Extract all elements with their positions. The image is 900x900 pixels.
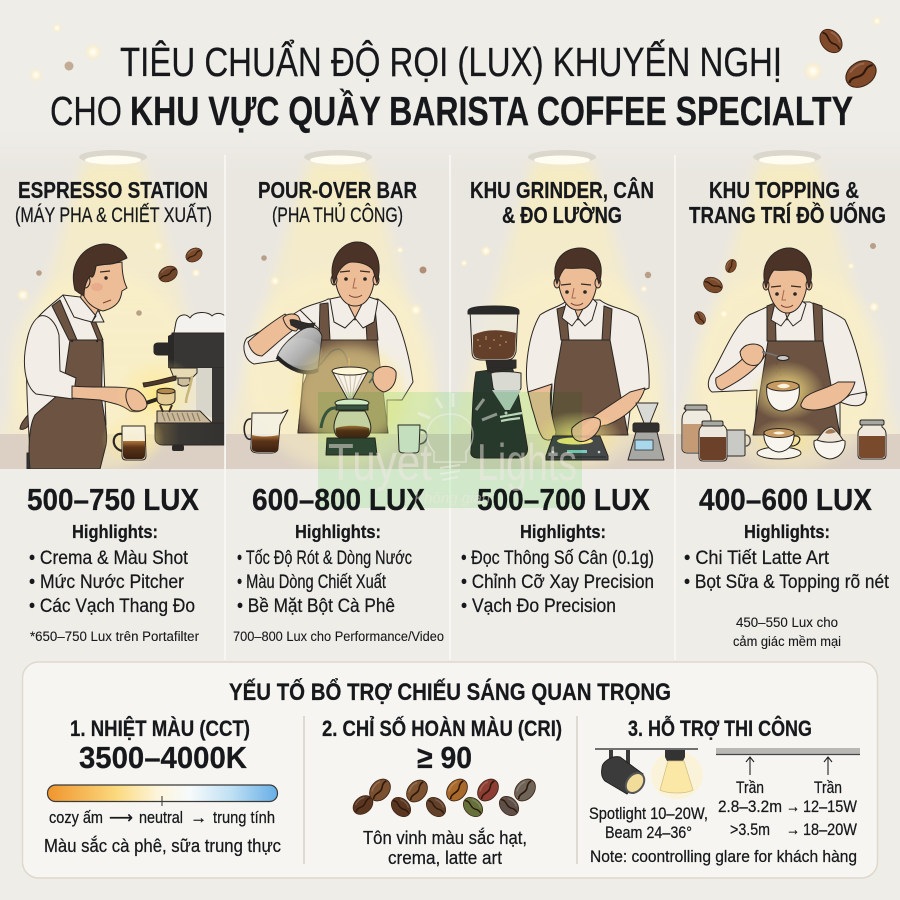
highlights list: 700–800 Lux cho Performance/Video <box>233 629 444 644</box>
illustration: barista finishing latte <box>682 243 886 470</box>
highlights list: • Các Vạch Thang Đo <box>29 596 195 617</box>
panel: supporting lighting factors <box>22 662 878 878</box>
section: colour temperature: 1. NHIỆT MÀU (CCT) <box>70 716 250 741</box>
section: colour rendering index: ≥ 90 <box>417 740 472 775</box>
highlights list <box>684 522 890 649</box>
section: colour temperature: 3500–4000K <box>79 740 248 775</box>
ceiling height table: → <box>786 797 800 816</box>
section: installation support: Note: coontrolling glare for khách hàng <box>590 847 857 866</box>
illustration: barista with grinder and scale <box>460 245 665 470</box>
highlights list: • Vạch Đo Precision <box>461 596 616 617</box>
ceiling height table <box>718 779 857 839</box>
highlights list: • Mức Nước Pitcher <box>29 572 185 593</box>
decorative coffee beans, top right <box>29 16 882 93</box>
coffee bean colour samples <box>349 775 540 821</box>
ceiling height table: 12–15W <box>803 797 857 816</box>
section: colour rendering index: 2. CHỈ SỐ HOÀN MÀU (CRI) <box>322 715 562 741</box>
heading: (PHA THỦ CÔNG) <box>272 203 403 227</box>
icon: track spotlight <box>595 749 698 797</box>
title <box>50 38 853 134</box>
CCT scale labels <box>49 809 275 827</box>
lux value: 600–800 LUX <box>252 482 425 517</box>
CCT scale labels: trung tính <box>213 809 275 827</box>
highlights list: • Bề Mặt Bột Cà Phê <box>237 596 395 617</box>
ceiling lamp <box>528 150 596 164</box>
highlights list: • Màu Dòng Chiết Xuất <box>237 572 387 593</box>
panel: grinder and scale <box>460 150 665 617</box>
ceiling height table: 2.8–3.2m <box>718 797 782 816</box>
CCT scale labels: ⟶ <box>109 809 133 827</box>
highlights list: • Chỉnh Cỡ Xay Precision <box>461 572 654 593</box>
watermark: Tuyet Lights: - Không gian <box>405 490 490 507</box>
section: colour rendering index: crema, latte art <box>388 847 502 868</box>
heading <box>470 176 654 228</box>
ceiling lamp <box>79 150 147 164</box>
highlights list <box>29 522 199 644</box>
section: installation support <box>589 715 860 866</box>
highlights list: Highlights: <box>744 522 830 542</box>
ceiling lamp <box>753 150 821 164</box>
highlights list: Highlights: <box>72 522 158 542</box>
section: colour temperature <box>44 716 281 856</box>
highlights list: *650–750 Lux trên Portafilter <box>30 629 199 644</box>
heading: POUR-OVER BAR <box>258 177 417 203</box>
illustration: barista pouring with kettle <box>244 242 435 470</box>
panel: pour-over bar <box>233 150 444 644</box>
CCT scale labels: cozy ấm <box>49 809 103 827</box>
watermark: Tuyet Lights: Lights <box>477 434 577 492</box>
panel: topping and decoration <box>682 150 890 649</box>
panel heading: YẾU TỐ BỔ TRỢ CHIẾU SÁNG QUAN TRỌNG <box>229 678 671 706</box>
highlights list: 450–550 Lux cho <box>736 615 838 630</box>
heading <box>15 177 212 227</box>
heading: KHU GRINDER, CÂN <box>470 176 654 203</box>
ceiling height table: → <box>786 820 800 839</box>
highlights list: • Crema & Màu Shot <box>29 548 189 569</box>
CCT gradient bar <box>48 785 278 806</box>
ceiling lamp <box>304 150 372 164</box>
highlights list: Highlights: <box>295 522 381 542</box>
lux value: 400–600 LUX <box>699 482 872 517</box>
heading: & ĐO LƯỜNG <box>502 201 622 228</box>
highlights list: • Chi Tiết Latte Art <box>684 548 830 569</box>
CCT scale labels: → <box>190 809 207 827</box>
heading <box>689 177 886 228</box>
section: colour temperature: Màu sắc cà phê, sữa trung thực <box>44 835 281 856</box>
heading: ESPRESSO STATION <box>18 177 208 203</box>
section: colour rendering index <box>322 715 562 868</box>
ceiling height table: 18–20W <box>803 820 857 839</box>
ceiling height table: >3.5m <box>730 820 770 839</box>
watermark: Tuyet Lights <box>318 392 582 508</box>
highlights list: • Đọc Thông Số Cân (0.1g) <box>461 548 654 569</box>
section: installation support: 3. HỖ TRỢ THI CÔNG <box>628 715 812 741</box>
highlights list: Highlights: <box>520 522 606 542</box>
highlights list <box>461 522 654 617</box>
highlights list <box>233 522 444 644</box>
lux value: 500–700 LUX <box>477 482 650 517</box>
heading: (MÁY PHA & CHIẾT XUẤT) <box>15 204 212 227</box>
title: CHO <box>50 88 122 134</box>
section: installation support: Beam 24–36° <box>605 824 692 842</box>
icon: spotlight with beam <box>651 750 703 799</box>
lux value: 500–750 LUX <box>27 482 199 517</box>
ceiling height table: Trần <box>736 779 764 797</box>
column dividers <box>225 155 675 660</box>
CCT scale labels: neutral <box>139 809 183 827</box>
section: colour rendering index: Tôn vinh màu sắc hạt, <box>363 827 527 848</box>
section: installation support: Spotlight 10–20W, <box>589 805 708 823</box>
icon: ceiling with arrows <box>716 748 860 775</box>
heading <box>258 177 417 227</box>
panel: espresso station <box>10 150 225 644</box>
heading: KHU TOPPING & <box>709 177 859 203</box>
ceiling height table: Trần <box>814 779 842 797</box>
highlights list: cảm giác mềm mại <box>733 634 841 649</box>
panel: illustration backdrop <box>0 130 900 469</box>
watermark: Tuyet Lights: Tuyet <box>328 434 432 492</box>
illustration: barista at espresso machine <box>10 240 225 470</box>
highlights list: • Tốc Độ Rót & Dòng Nước <box>237 548 412 569</box>
